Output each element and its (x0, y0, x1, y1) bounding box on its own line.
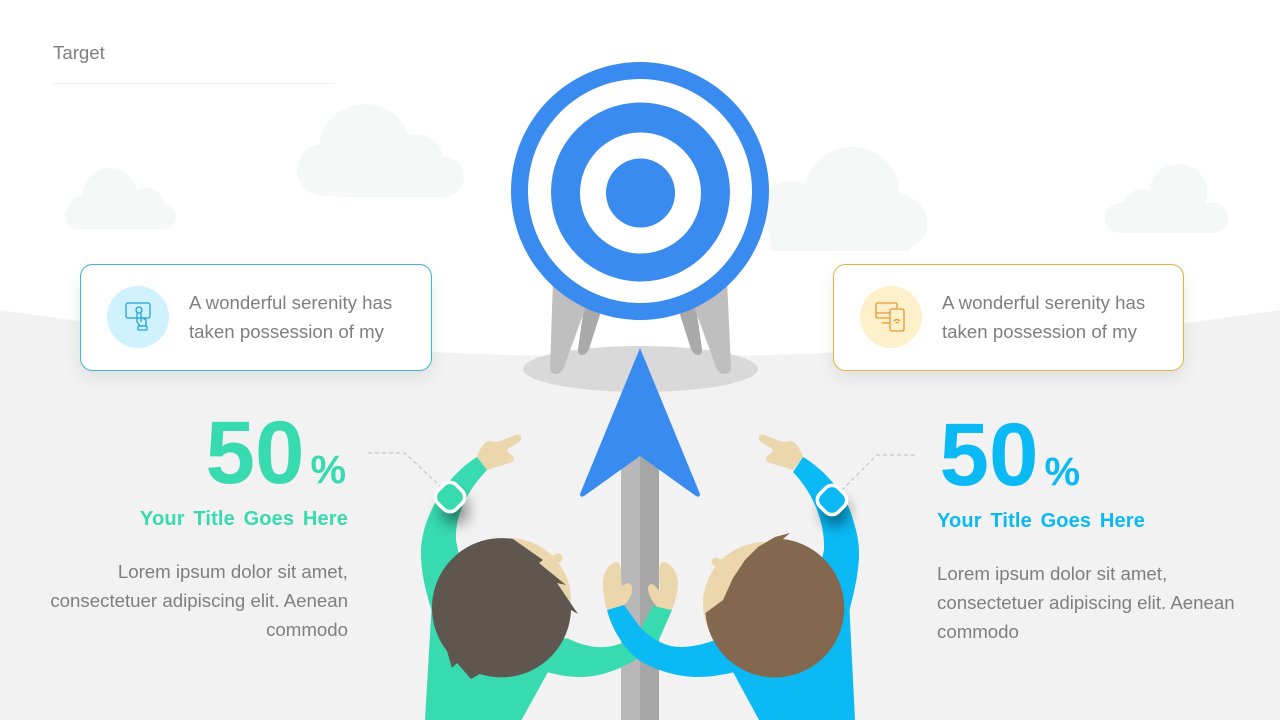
lower arm (547, 606, 672, 677)
body text: Lorem ipsum dolor sit amet, (937, 563, 1167, 584)
lower-hand partner (648, 562, 678, 610)
body text: commodo (266, 619, 348, 640)
watch (432, 479, 468, 515)
icon: devices wifi (860, 286, 922, 348)
cloud: far left (65, 168, 176, 229)
body text: commodo (937, 621, 1019, 642)
percentage: 50% (206, 402, 346, 502)
card text: A wonderful serenity has (189, 292, 392, 313)
person: left, green (421, 434, 678, 720)
callout line: left (368, 453, 440, 486)
percentage: 50% (940, 404, 1080, 504)
stat block: left (50, 402, 348, 640)
raised hand (759, 434, 803, 470)
card text: taken possession of my (189, 321, 385, 342)
watch shadow (822, 499, 848, 525)
arrow head (580, 348, 700, 497)
body (715, 600, 855, 720)
body text: consectetuer adipiscing elit. Aenean (50, 590, 348, 611)
hair (432, 538, 578, 679)
card: left (80, 264, 432, 370)
stand shadow (523, 346, 758, 392)
background ground (0, 310, 1280, 720)
skin and ear (703, 542, 827, 666)
card text: taken possession of my (942, 321, 1138, 342)
body (425, 600, 570, 720)
cloud: far right (1105, 164, 1228, 233)
raised arm (793, 457, 859, 613)
target stand (523, 280, 758, 392)
heading: Your Title Goes Here (140, 508, 348, 530)
body text: Lorem ipsum dolor sit amet, (118, 561, 348, 582)
cloud: centre right (760, 147, 927, 251)
person: right, blue (607, 434, 859, 720)
card text: A wonderful serenity has (942, 292, 1145, 313)
watch (814, 482, 850, 518)
stat block: right (937, 404, 1235, 642)
card: right (834, 264, 1184, 370)
heading: Your Title Goes Here (937, 510, 1145, 532)
raised arm (421, 457, 487, 612)
icon: touch screen (107, 286, 169, 348)
target bullseye (511, 62, 769, 320)
arrow pole (621, 455, 659, 720)
watch shadow (442, 497, 468, 523)
skin and ear (447, 538, 571, 662)
callout line: right (842, 455, 915, 490)
hair (706, 533, 844, 678)
cloud: upper left (297, 104, 464, 197)
lower hand (603, 562, 632, 610)
body text: consectetuer adipiscing elit. Aenean (937, 592, 1235, 613)
raised hand (477, 434, 521, 470)
title: Target (53, 42, 106, 63)
lower arm (607, 605, 735, 677)
